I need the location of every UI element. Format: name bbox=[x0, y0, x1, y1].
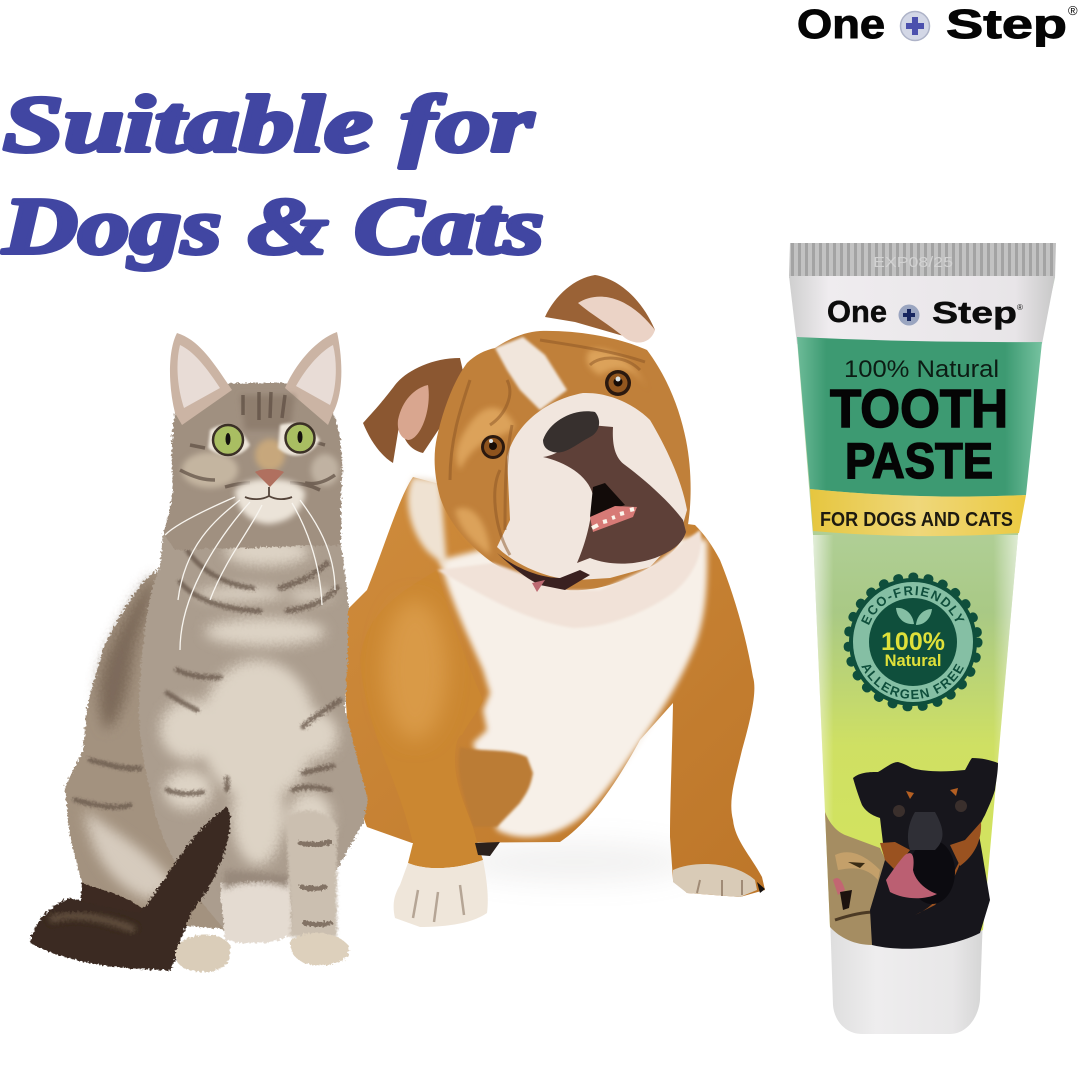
tube body bbox=[790, 278, 1055, 947]
title bbox=[2, 81, 544, 271]
tube logo: ® bbox=[1017, 303, 1023, 312]
title: Suitable for bbox=[3, 81, 534, 169]
title: Dogs & Cats bbox=[2, 183, 544, 271]
eco badge bbox=[844, 572, 982, 712]
cat nose bbox=[255, 469, 284, 487]
cat right foreleg bbox=[287, 810, 337, 937]
cat head bbox=[163, 383, 342, 550]
band caption: FOR DOGS AND CATS bbox=[820, 509, 1013, 531]
tube top section bbox=[789, 276, 1055, 344]
dog photo on tube bbox=[853, 758, 998, 949]
cat whiskers bbox=[165, 497, 335, 650]
illustration: tabby cat bbox=[30, 332, 368, 972]
cat dark back strip bbox=[99, 575, 155, 730]
dog front paw bbox=[394, 860, 488, 927]
brand logo: ® bbox=[1068, 3, 1078, 18]
tube cap bbox=[830, 915, 983, 1034]
dog ear right bbox=[545, 275, 655, 340]
cat haunch cream bbox=[85, 810, 175, 900]
tooth paste text: TOOTH bbox=[830, 379, 1008, 439]
dog front leg bbox=[360, 570, 483, 868]
cat tail bbox=[30, 807, 230, 970]
tube logo: One bbox=[827, 294, 887, 329]
tooth paste text: PASTE bbox=[845, 433, 993, 489]
tube logo: Step bbox=[932, 295, 1017, 330]
cat ears bbox=[170, 333, 232, 425]
badge arc text: ECO-FRIENDLY bbox=[861, 586, 965, 625]
eco badge: Natural bbox=[885, 652, 941, 670]
eco badge: ALLERGEN FREE bbox=[861, 664, 964, 700]
cat eyes bbox=[213, 424, 314, 455]
tube crimp bbox=[789, 243, 1056, 278]
cat under-haunch bbox=[80, 883, 150, 915]
dog right paw bbox=[673, 864, 757, 897]
dog white ruff bbox=[408, 477, 447, 568]
dog lower lip bbox=[497, 553, 590, 590]
dog ear left bbox=[363, 358, 465, 463]
yellow band bbox=[810, 489, 1026, 536]
dog body bbox=[345, 477, 765, 897]
expiry stamp: EXP08/25 bbox=[873, 254, 953, 271]
dog eyes bbox=[481, 370, 631, 459]
cat muzzle bbox=[235, 479, 305, 524]
green band bbox=[797, 337, 1042, 497]
brand logo: Step bbox=[946, 1, 1067, 47]
cat cream patches bbox=[160, 538, 338, 865]
icon: plus badge bbox=[900, 12, 930, 40]
cat stripes bbox=[75, 530, 340, 807]
dog dark muzzle bbox=[543, 425, 686, 564]
brand logo: One bbox=[797, 1, 885, 47]
cat torso bbox=[139, 533, 368, 935]
cat forehead stripes bbox=[180, 392, 335, 490]
cat eye patches bbox=[208, 423, 320, 456]
dog head highlights bbox=[455, 349, 650, 555]
cat fur group bbox=[30, 383, 368, 972]
dog gums and teeth bbox=[590, 506, 637, 532]
cat paws bbox=[176, 934, 230, 972]
dog muzzle bbox=[497, 393, 687, 580]
soft ground shadow bbox=[455, 842, 695, 882]
dog white chest bbox=[440, 530, 707, 837]
cat photo on tube bbox=[825, 812, 890, 945]
cat face shading bbox=[182, 395, 339, 488]
illustration: bulldog bbox=[345, 275, 765, 927]
badge centre text: 100% bbox=[881, 628, 945, 656]
cat back bbox=[65, 570, 230, 930]
dog underside shadow bbox=[475, 842, 500, 856]
dog head bbox=[435, 331, 691, 590]
tube highlight bbox=[813, 535, 1018, 930]
dog nail bbox=[757, 882, 765, 893]
product: toothpaste tube bbox=[789, 243, 1056, 1034]
brand logo bbox=[797, 1, 1078, 47]
cat belly bbox=[220, 880, 292, 943]
dog wrinkles bbox=[450, 340, 645, 555]
dog mouth bbox=[590, 483, 625, 517]
dog blaze bbox=[495, 337, 567, 410]
dog neck fold bbox=[437, 530, 701, 628]
tube logo bbox=[827, 294, 1023, 330]
badge leaves bbox=[896, 608, 932, 625]
dog belly patch bbox=[459, 747, 533, 827]
tooth paste text bbox=[830, 379, 1008, 489]
band heading: 100% Natural bbox=[844, 356, 999, 383]
dog nose bbox=[543, 411, 599, 453]
dog leg highlight bbox=[383, 600, 447, 740]
